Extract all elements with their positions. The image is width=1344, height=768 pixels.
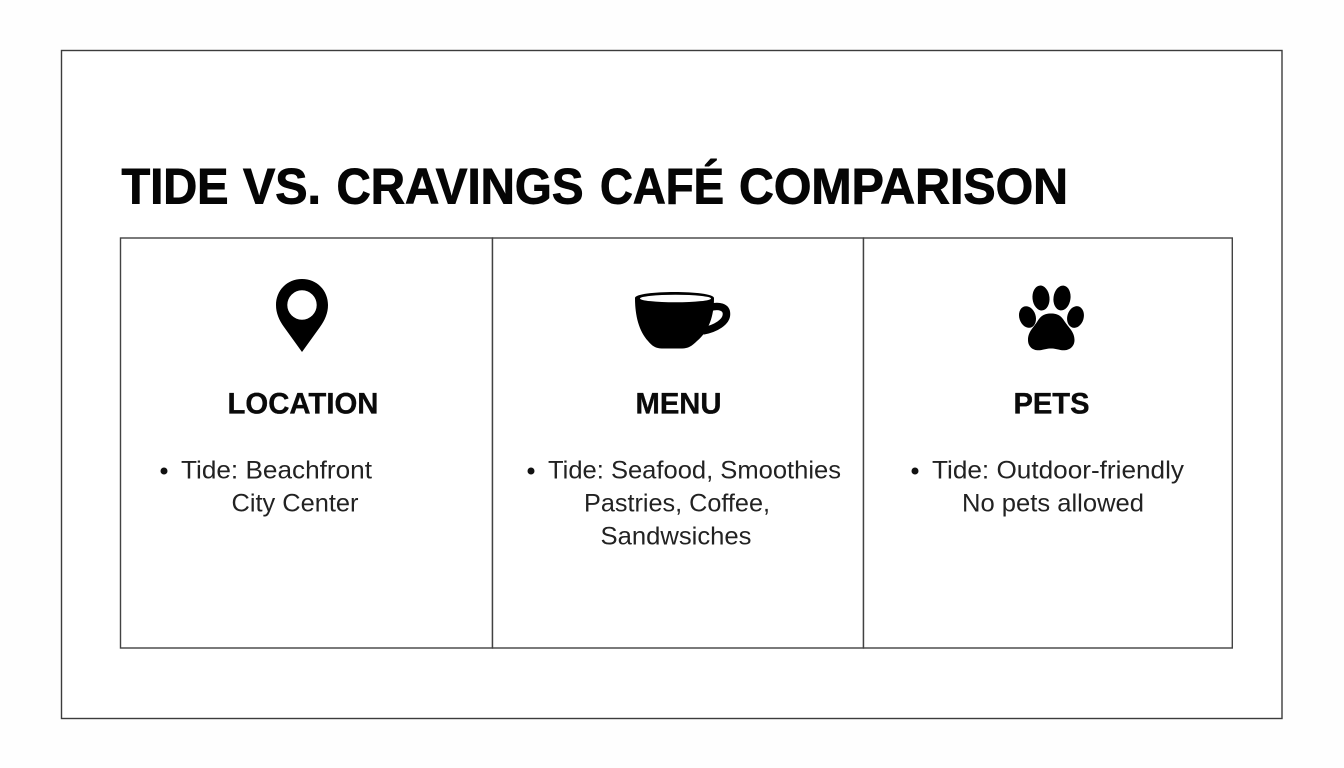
icon: coffee cup <box>635 292 726 348</box>
icon: paw print <box>1016 284 1086 350</box>
panel: location <box>120 238 492 648</box>
panel: pets <box>864 238 1232 648</box>
list: menu: Pastries, Coffee, <box>584 490 770 518</box>
heading: pets: PETS <box>1014 388 1090 420</box>
list: pets <box>912 456 1185 518</box>
outer frame <box>62 50 1282 718</box>
title: COMPARISON <box>739 158 1068 214</box>
list: location: Tide: Beachfront <box>181 456 372 484</box>
list: menu: Sandwsiches <box>600 522 752 550</box>
panel: menu <box>492 238 864 648</box>
list: pets: No pets allowed <box>962 490 1144 518</box>
list: location: City Center <box>232 490 358 518</box>
title: CAFÉ <box>600 158 724 214</box>
list: pets: Tide: Outdoor-friendly <box>932 456 1185 484</box>
list: menu: Tide: Seafood, Smoothies <box>548 456 841 484</box>
icon: map pin <box>276 279 328 352</box>
list: location <box>160 456 372 518</box>
title: VS. <box>243 158 321 214</box>
heading: location: LOCATION <box>228 388 378 420</box>
title: CRAVINGS <box>336 158 584 214</box>
list: menu <box>528 456 841 550</box>
title: TIDE <box>122 158 228 214</box>
heading: menu: MENU <box>636 388 722 420</box>
